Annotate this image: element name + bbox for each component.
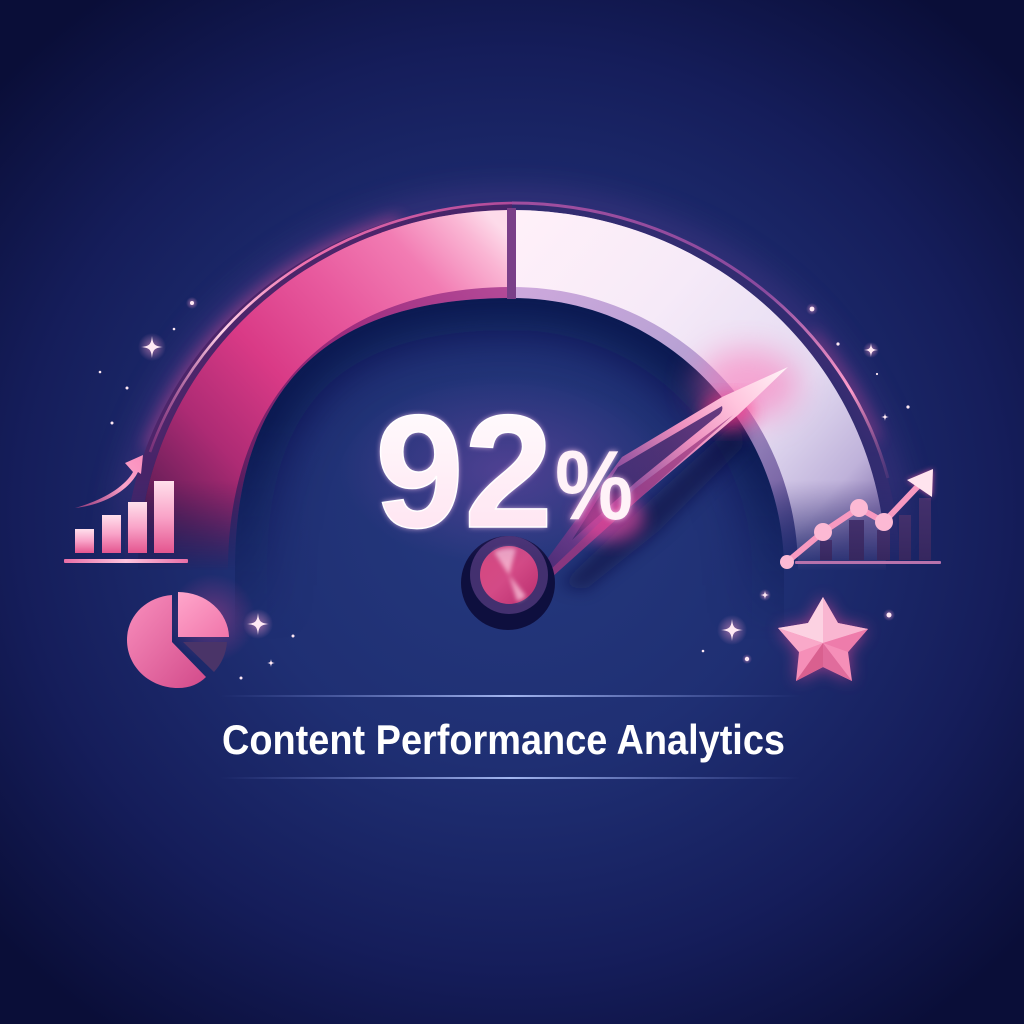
star glow bbox=[778, 597, 868, 681]
gap between band and rim line, right bbox=[806, 334, 894, 514]
gauge arc bbox=[114, 184, 909, 589]
gap between band and rim line, left bbox=[124, 203, 512, 570]
right band: light segment bbox=[512, 210, 886, 570]
value glow: % bbox=[555, 430, 633, 540]
bars bbox=[75, 481, 174, 553]
gauge divider bbox=[507, 208, 516, 299]
bottom rule bbox=[220, 777, 800, 779]
arrow glow bbox=[907, 469, 933, 497]
needle shadow bbox=[560, 420, 745, 590]
needle tip glow on arc bbox=[696, 349, 800, 421]
rising arrow bbox=[75, 455, 143, 508]
dark bars bbox=[820, 498, 931, 560]
right band rim bbox=[516, 210, 863, 549]
icon: bar chart with arrow bbox=[64, 455, 188, 563]
needle bbox=[545, 367, 788, 590]
gauge right highlight line bbox=[512, 203, 888, 478]
value glow bbox=[375, 382, 633, 562]
star facets bbox=[778, 597, 868, 681]
left band rim bbox=[196, 210, 507, 548]
needle lower shade bbox=[548, 415, 733, 578]
gauge left pink glow bbox=[150, 222, 400, 450]
gauge left highlight line bbox=[150, 203, 512, 452]
pie glow bbox=[168, 574, 256, 662]
icon: pie chart bbox=[127, 574, 256, 688]
pie upper slice bbox=[178, 592, 229, 637]
trend line bbox=[787, 484, 920, 562]
chart baseline bbox=[64, 559, 188, 563]
percent pink glow bbox=[576, 494, 644, 542]
icon: star bbox=[778, 597, 868, 681]
value: 92% bbox=[340, 375, 670, 565]
arrow head bbox=[907, 469, 933, 497]
decorative sparkles bbox=[99, 297, 910, 680]
purple aura bbox=[340, 375, 670, 565]
needle crossing glow bbox=[702, 394, 754, 430]
chart baseline bbox=[795, 561, 941, 564]
data points bbox=[780, 499, 893, 569]
gauge right pink glow bbox=[810, 335, 875, 440]
top rule bbox=[220, 695, 800, 697]
hub ring bbox=[470, 536, 548, 614]
icon: line chart with arrow bbox=[780, 469, 941, 569]
pie dark slice bbox=[183, 642, 227, 672]
hub sheen bbox=[494, 548, 526, 601]
gauge hub bbox=[461, 536, 555, 630]
left band: pink segment bbox=[138, 210, 512, 570]
inner shadow bbox=[235, 298, 784, 589]
needle inner groove bbox=[572, 406, 722, 540]
title: Content Performance Analytics bbox=[222, 716, 785, 763]
value glow: 92 bbox=[375, 382, 553, 562]
pie main slice bbox=[127, 595, 206, 688]
number 92: 92 bbox=[375, 382, 553, 562]
needle body bbox=[545, 367, 788, 578]
hub knob bbox=[480, 546, 538, 604]
hub shadow bbox=[461, 536, 555, 630]
gauge outer purple glow bbox=[124, 203, 900, 570]
percent sign: % bbox=[555, 430, 633, 540]
